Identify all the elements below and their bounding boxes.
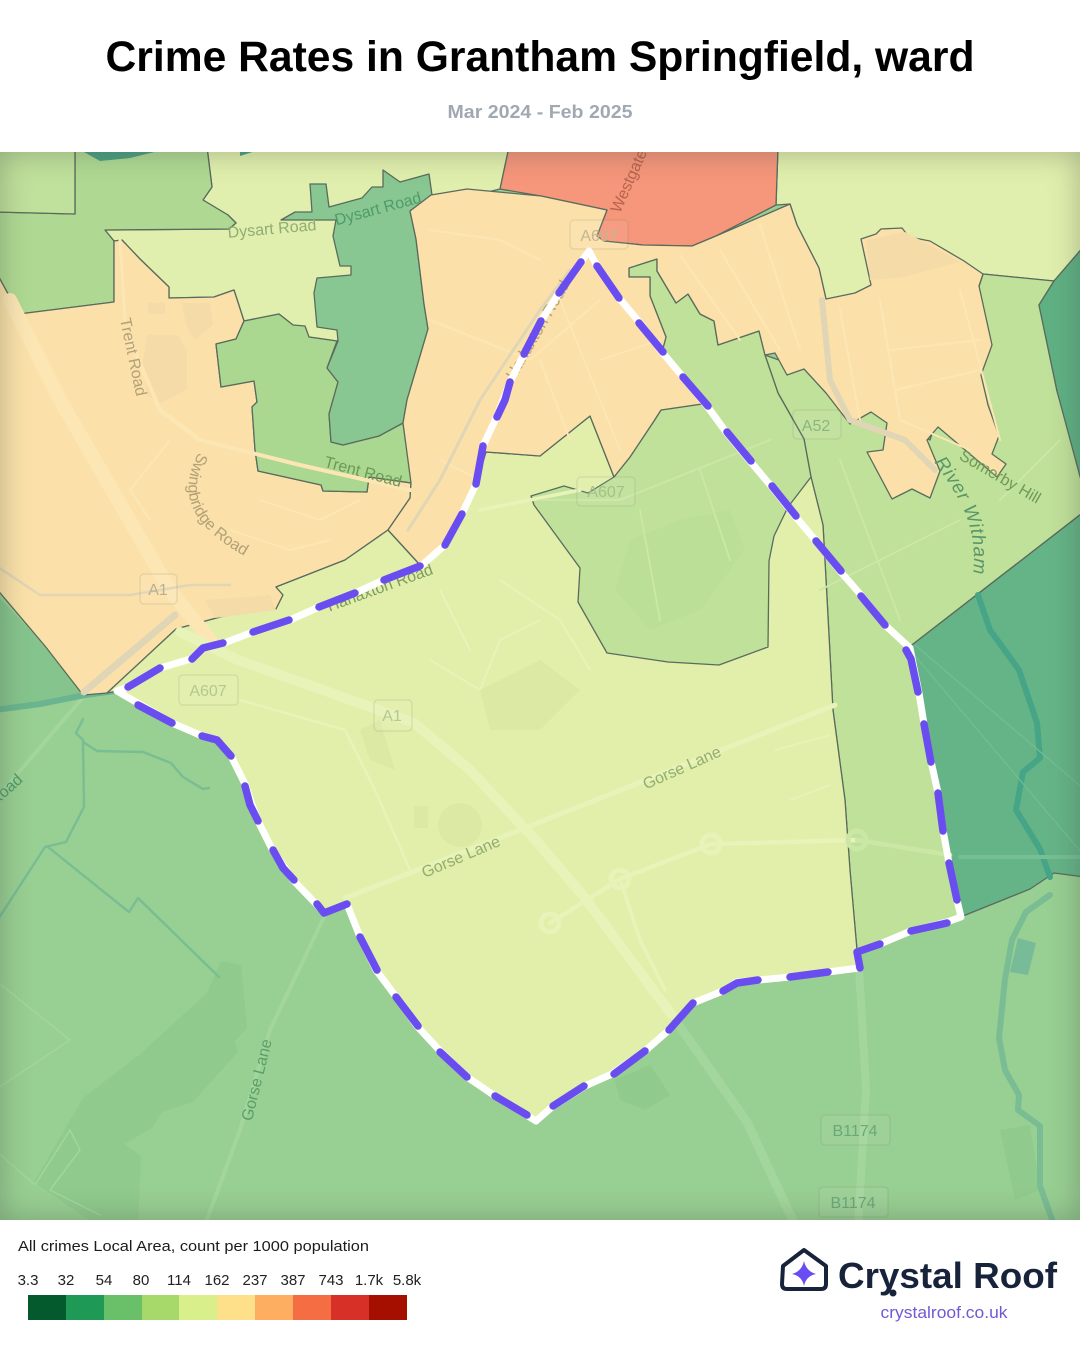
- legend tick labels: 114: [167, 1272, 191, 1289]
- area: top-left: [0, 147, 236, 314]
- map base: lowest-crime surrounding area: [0, 152, 1080, 1220]
- logo: house icon: [782, 1250, 826, 1289]
- area: far north-east dark: [1039, 245, 1080, 495]
- road shields: [140, 220, 890, 1217]
- area: west orange: [0, 240, 411, 695]
- canal strip: [0, 691, 115, 710]
- choropleth map: Dysart Road: [227, 217, 317, 242]
- area: east dark green: [908, 511, 1080, 916]
- rural roads: [0, 695, 866, 1225]
- choropleth map: [0, 147, 1080, 1220]
- legend tick labels: [18, 1272, 422, 1289]
- logo: wordmark: Crystal Roof: [838, 1255, 1058, 1296]
- woodland patches: [34, 961, 1040, 1225]
- area: north light: [105, 147, 509, 341]
- road shield labels: B1174: [832, 1123, 878, 1140]
- legend tick labels: 743: [318, 1272, 344, 1289]
- ward boundary: purple dashes: [128, 262, 957, 1115]
- railway and major corridors in grey: [0, 270, 935, 692]
- orange area streets: [10, 225, 1000, 640]
- legend tick labels: 3.3: [18, 1272, 38, 1289]
- road shield labels: A52: [802, 418, 830, 435]
- east river and railway: [910, 595, 1080, 877]
- choropleth map: Gorse Lane: [419, 833, 503, 882]
- river south-east: [999, 895, 1054, 1225]
- choropleth map: Dysart Road: [333, 190, 423, 229]
- area: east green: [765, 274, 1080, 950]
- legend tick labels: 162: [204, 1272, 230, 1289]
- choropleth map: Trent Road: [116, 316, 149, 398]
- choropleth map: Harlaxton Road: [503, 278, 574, 383]
- choropleth map: Swingbridge Road: [185, 454, 250, 556]
- ward boundary: white base line: [117, 251, 961, 1121]
- area: top-left corner: [0, 147, 75, 214]
- title: Crime Rates in Grantham Springfield, ward: [106, 33, 974, 81]
- choropleth map: Gorse Lane: [239, 1037, 276, 1123]
- ward roads: [180, 490, 857, 1014]
- legend title: All crimes Local Area, count per 1000 population: [18, 1238, 369, 1255]
- website link: crystalroof.co.uk: [880, 1304, 1008, 1322]
- subtitle: date range: Mar 2024 - Feb 2025: [448, 101, 632, 122]
- road shield labels: B1174: [830, 1195, 876, 1212]
- road shield labels: A1: [382, 708, 402, 725]
- road shield labels: [148, 228, 878, 1212]
- south-west darker area: [0, 593, 83, 712]
- area: inner green: [531, 259, 811, 665]
- legend tick labels: 5.8k: [393, 1272, 422, 1289]
- area: red town centre: [500, 147, 778, 246]
- legend tick labels: 54: [96, 1272, 112, 1289]
- streams: [0, 719, 219, 977]
- choropleth map: River Witham: [934, 457, 986, 574]
- green area streets: [540, 440, 1060, 855]
- road shield labels: A607: [189, 683, 227, 700]
- choropleth map: Trent Road: [322, 454, 403, 491]
- legend tick labels: 387: [280, 1272, 306, 1289]
- choropleth map: Westgate: [608, 147, 651, 215]
- area: Springfield ward: [107, 416, 859, 1121]
- choropleth map: Somerby Hill: [956, 447, 1043, 507]
- road shield labels: A607: [587, 484, 625, 501]
- legend tick labels: 1.7k: [355, 1272, 384, 1289]
- inner green darker woods: [615, 510, 745, 630]
- choropleth map: Gorse Lane: [641, 744, 724, 793]
- area: north-east light: [776, 147, 1080, 300]
- legend colour scale: [28, 1295, 407, 1320]
- legend tick labels: 80: [133, 1272, 149, 1289]
- road shield labels: A607: [580, 228, 618, 245]
- area: Trent Road green: [216, 314, 412, 492]
- area: central orange: [388, 189, 1006, 566]
- road shield labels: A1: [148, 582, 168, 599]
- pond: [1010, 938, 1036, 975]
- area: top dark patches: [75, 147, 268, 161]
- legend tick labels: 32: [58, 1272, 74, 1289]
- choropleth map: Harlaxton Road: [325, 561, 435, 615]
- area: Dysart green block: [281, 170, 432, 445]
- legend tick labels: 237: [242, 1272, 268, 1289]
- ward buildings: [360, 660, 580, 847]
- orange area buildings: [143, 232, 960, 618]
